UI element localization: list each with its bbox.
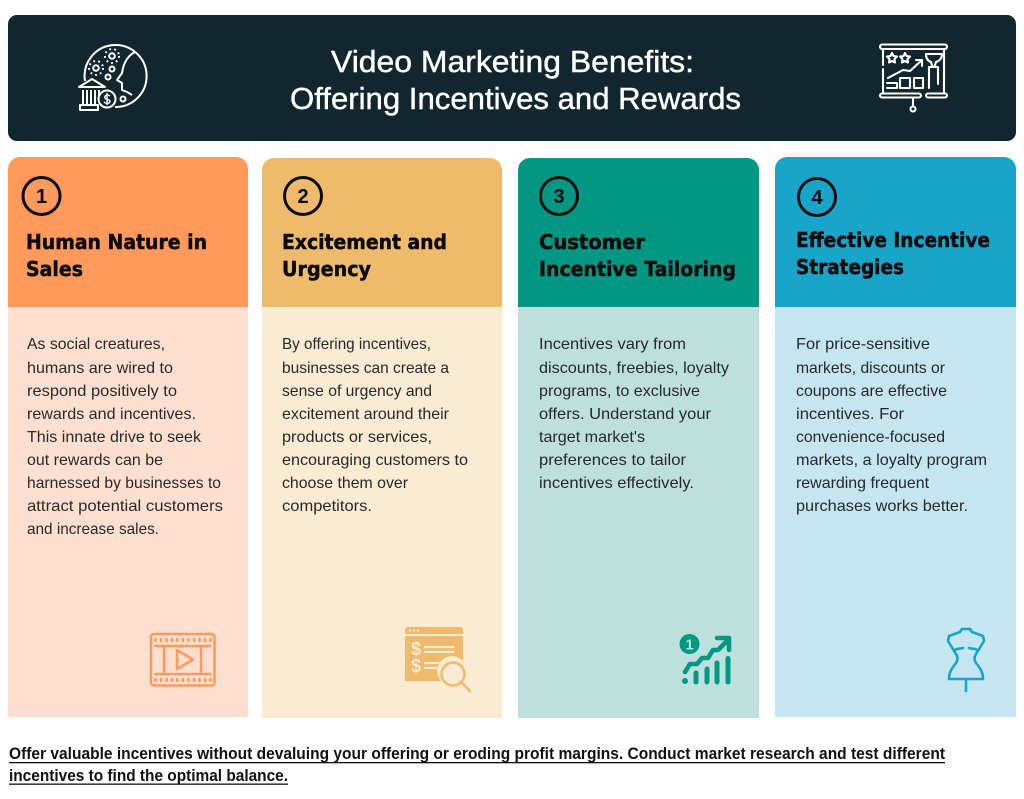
heading 4: Strategies bbox=[796, 255, 904, 279]
body text 4: markets, discounts or bbox=[796, 360, 945, 377]
number badge 4 bbox=[798, 178, 836, 216]
body text 2: choose them over bbox=[282, 475, 408, 492]
heading 4: Effective Incentive bbox=[796, 228, 990, 252]
body text 2: By offering incentives, bbox=[282, 336, 431, 353]
title bbox=[290, 44, 741, 116]
body text 1: out rewards can be bbox=[27, 452, 163, 469]
panel heading band 1 bbox=[8, 157, 248, 307]
number badge 1: 1 bbox=[36, 186, 47, 208]
icon: price list and magnifier bbox=[405, 627, 470, 691]
panel heading band 4 bbox=[775, 157, 1016, 307]
body text 2: excitement around their bbox=[282, 406, 449, 423]
body text 1: harnessed by businesses to bbox=[27, 475, 221, 492]
body text 2 bbox=[282, 336, 468, 515]
body text 1: This innate drive to seek bbox=[27, 429, 201, 446]
body text 2: products or services, bbox=[282, 429, 432, 446]
heading 1 bbox=[26, 230, 207, 281]
body text 1: respond positively to bbox=[27, 383, 177, 400]
title: Offering Incentives and Rewards bbox=[290, 81, 741, 116]
body text 3: discounts, freebies, loyalty bbox=[539, 360, 729, 377]
icon: growth chart bbox=[680, 634, 729, 684]
body text 1 bbox=[27, 336, 223, 538]
body text 4: convenience-focused bbox=[796, 429, 945, 446]
body text 3 bbox=[539, 336, 729, 492]
body text 4: rewarding frequent bbox=[796, 475, 930, 492]
body text 2: encouraging customers to bbox=[282, 452, 468, 469]
heading 2: Urgency bbox=[282, 257, 371, 281]
header banner bbox=[8, 15, 1016, 141]
number badge 3 bbox=[540, 178, 578, 214]
heading 4 bbox=[796, 228, 990, 279]
number badge 2 bbox=[284, 178, 322, 214]
panel: Effective Incentive Strategies bbox=[775, 157, 1016, 717]
icon: head and bank bbox=[79, 45, 147, 110]
icon: film strip bbox=[151, 634, 214, 686]
body text 1: As social creatures, bbox=[27, 336, 165, 353]
icon: price list and magnifier: $ bbox=[411, 656, 421, 676]
heading 3: Customer bbox=[539, 230, 646, 254]
heading 2: Excitement and bbox=[282, 230, 447, 254]
heading 2 bbox=[282, 230, 447, 281]
body text 3: offers. Understand your bbox=[539, 406, 711, 423]
body text 2: competitors. bbox=[282, 498, 372, 515]
footer note: Offer valuable incentives without devaluing your offering or eroding profit margins. Conduct market research and test different bbox=[9, 745, 946, 763]
body text 4: purchases works better. bbox=[796, 498, 968, 515]
icon: dress form bbox=[948, 629, 984, 691]
panel: Customer Incentive Tailoring bbox=[518, 158, 759, 718]
heading 3: Incentive Tailoring bbox=[539, 257, 736, 281]
number badge 3: 3 bbox=[553, 186, 565, 208]
number badge 4: 4 bbox=[811, 187, 823, 209]
body text 3: preferences to tailor bbox=[539, 452, 686, 469]
body text 3: programs, to exclusive bbox=[539, 383, 700, 400]
body text 3: target market's bbox=[539, 429, 645, 446]
body text 3: incentives effectively. bbox=[539, 475, 694, 492]
body text 1: attract potential customers bbox=[27, 498, 223, 515]
panel heading band 3 bbox=[518, 158, 759, 307]
body text 1: rewards and incentives. bbox=[27, 406, 196, 423]
body text 2: sense of urgency and bbox=[282, 383, 432, 400]
heading 1: Human Nature in bbox=[26, 230, 207, 254]
title: Video Marketing Benefits: bbox=[331, 44, 694, 79]
body text 3: Incentives vary from bbox=[539, 336, 686, 353]
heading 3 bbox=[539, 230, 736, 281]
icon: price list and magnifier: $ bbox=[411, 639, 421, 659]
body text 4: For price-sensitive bbox=[796, 336, 930, 353]
body text 4 bbox=[796, 336, 987, 515]
body text 1: humans are wired to bbox=[27, 360, 173, 377]
heading 1: Sales bbox=[26, 257, 83, 281]
body text 1: and increase sales. bbox=[27, 521, 159, 538]
icon: presentation board bbox=[880, 44, 947, 112]
body text 2: businesses can create a bbox=[282, 360, 449, 377]
number badge 1 bbox=[23, 178, 60, 214]
footer note: incentives to find the optimal balance. bbox=[9, 767, 288, 785]
body text 4: coupons are effective bbox=[796, 383, 947, 400]
footer note bbox=[9, 745, 946, 785]
panel: Human Nature in Sales bbox=[8, 157, 248, 717]
number badge 2: 2 bbox=[297, 186, 309, 208]
body text 4: incentives. For bbox=[796, 406, 904, 423]
panel heading band 2 bbox=[262, 158, 502, 307]
panel: Excitement and Urgency bbox=[262, 158, 502, 718]
body text 4: markets, a loyalty program bbox=[796, 452, 987, 469]
icon: growth chart: 1 bbox=[685, 636, 694, 654]
